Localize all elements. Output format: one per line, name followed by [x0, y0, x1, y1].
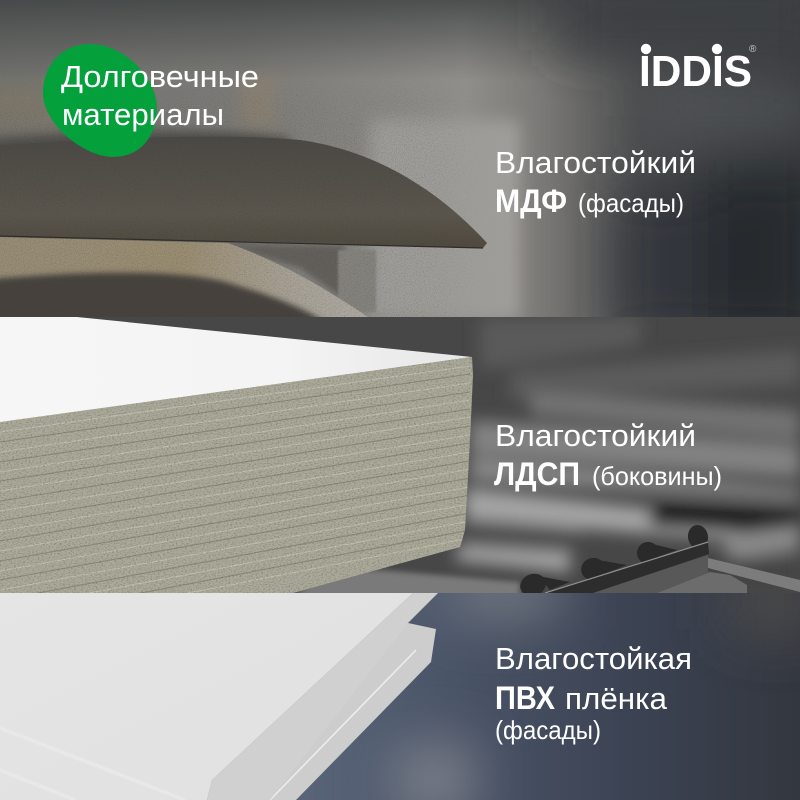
lower slab dark shape: [0, 273, 330, 325]
logo: IDDIS: IDDIS: [639, 47, 752, 96]
roller conveyor: [520, 525, 800, 593]
lit wall under slab: [370, 120, 520, 320]
wheels: [520, 525, 708, 593]
rail highlight: [545, 542, 708, 593]
text block: chipboard: [494, 418, 722, 492]
bottom left roller: [294, 568, 522, 593]
green blob: [43, 44, 157, 157]
upper curved slab: [0, 137, 487, 248]
text block: MDF: (фасады): [578, 188, 684, 218]
panel: chipboard photo: [0, 317, 800, 593]
text block: PVC: (фасады): [495, 715, 601, 745]
wall background: [0, 0, 800, 317]
top board face: [0, 593, 413, 800]
rail: [545, 542, 709, 593]
white laminated top: [0, 317, 472, 423]
upper curved slab, soft left part: [0, 131, 290, 240]
tan wall patches: [0, 82, 268, 124]
slab seam: [0, 236, 483, 248]
right block: [657, 572, 747, 593]
upper shadow: [0, 0, 593, 70]
logo: IDDIS: ®: [749, 44, 757, 55]
text block: PVC: [495, 641, 692, 745]
text block: chipboard: ЛДСП: [494, 456, 580, 492]
seam lines: [147, 785, 148, 786]
text block: MDF: МДФ: [495, 183, 567, 219]
factory background: [0, 317, 800, 593]
text block: chipboard: Влагостойкий: [495, 418, 696, 453]
lit edge of lower slab: [0, 237, 368, 317]
right bar: [708, 558, 800, 592]
panel: PVC film photo: [0, 570, 800, 800]
background light and dark patches: [400, 570, 800, 800]
surface grain: [0, 84, 472, 317]
shaded vertical piece: [338, 250, 376, 312]
text block: PVC: плёнка: [565, 681, 668, 716]
text block: PVC: Влагостойкая: [495, 641, 692, 676]
bevel of top board: [207, 593, 438, 800]
shadow under slab: [236, 244, 347, 296]
lower board: [271, 623, 436, 800]
blue-grey background: [207, 593, 800, 800]
rail support plate: [593, 555, 708, 593]
title: Долговечные: [61, 59, 259, 94]
lower board highlight: [270, 650, 416, 800]
board edge stack: [0, 357, 473, 593]
text block: PVC: ПВХ: [495, 680, 556, 716]
blurred rollers: [455, 317, 800, 593]
title: [61, 59, 259, 132]
text block: chipboard: (боковины): [592, 461, 722, 491]
title: материалы: [62, 97, 224, 132]
text block: MDF: Влагостойкий: [495, 145, 696, 180]
blurred background shapes: [560, 0, 800, 340]
text block: MDF: [495, 145, 696, 219]
panel: MDF photo: [0, 0, 800, 340]
